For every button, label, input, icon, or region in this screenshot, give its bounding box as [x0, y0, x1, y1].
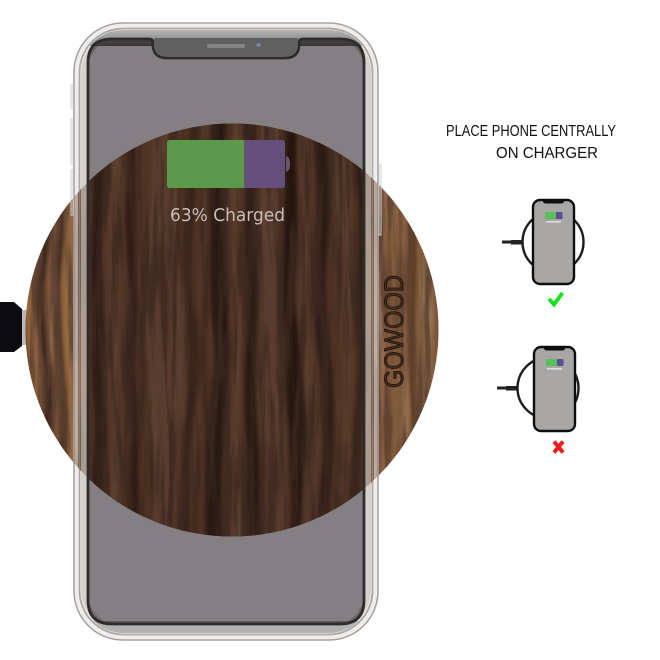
speaker [207, 44, 245, 48]
cross mark [554, 442, 563, 452]
side buttons [71, 85, 381, 235]
notch top bezel [154, 38, 298, 56]
cable [502, 240, 522, 244]
incorrect placement example [497, 347, 578, 452]
wireless charger wood disc [26, 124, 438, 536]
phone frame [74, 23, 378, 640]
small phone [534, 347, 575, 431]
check mark [549, 293, 562, 304]
battery cap [286, 156, 290, 172]
instruction heading: ON CHARGER [496, 145, 598, 162]
small label [546, 221, 561, 223]
screen border [88, 39, 364, 624]
correct placement example [502, 200, 584, 304]
small battery [546, 359, 564, 366]
small battery [545, 212, 562, 219]
screen backing [88, 39, 364, 624]
charger ring off-center [518, 358, 578, 418]
cable [497, 386, 517, 390]
top bezel [81, 30, 371, 46]
battery charged portion [167, 140, 244, 188]
charge status label: 63% Charged [170, 205, 285, 226]
camera [256, 43, 260, 47]
usb cable connector [0, 302, 28, 352]
battery indicator [167, 140, 290, 188]
phone outline [71, 23, 381, 640]
charger ring centered [522, 212, 584, 272]
screen [88, 39, 364, 624]
small notch [544, 347, 565, 350]
small phone [533, 200, 574, 284]
screen reflection over wood [89, 110, 363, 550]
battery empty portion [244, 140, 285, 188]
small notch [543, 200, 564, 204]
bottom bezel [81, 621, 371, 633]
engraved brand name GOWOOD: GOWOOD [379, 275, 409, 388]
instruction heading [446, 123, 616, 162]
small label [547, 368, 562, 370]
instruction heading: PLACE PHONE CENTRALLY [446, 123, 616, 140]
